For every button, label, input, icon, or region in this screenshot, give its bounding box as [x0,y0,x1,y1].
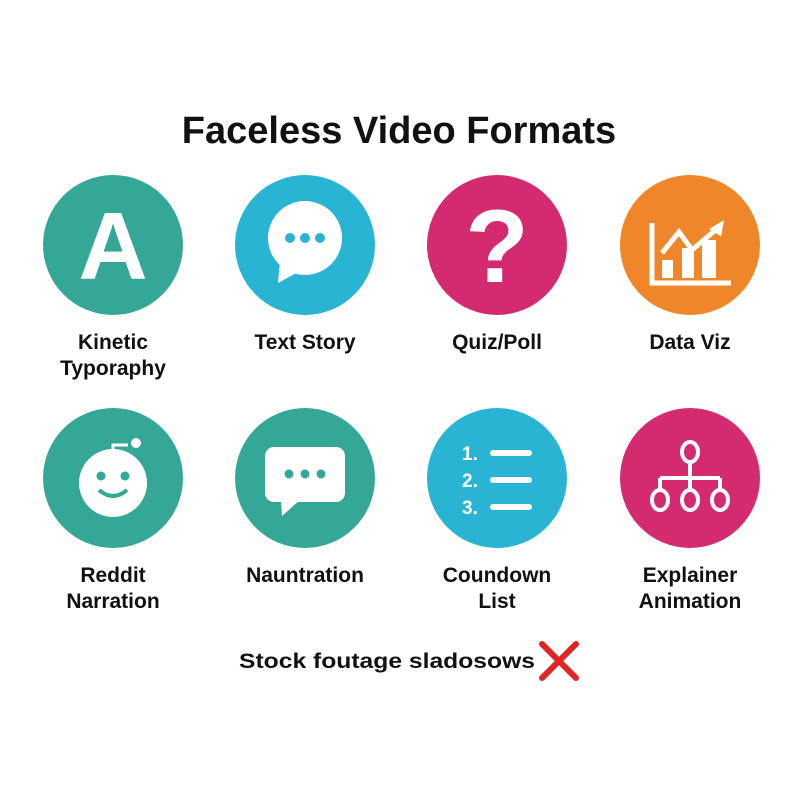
icon: question mark: ? [465,189,529,305]
label: Data Viz [649,331,731,354]
label: Typoraphy [60,357,166,380]
label: Narration [66,590,160,613]
label: Animation [639,590,741,613]
label: Text Story [254,331,356,354]
icon: hierarchy [652,442,728,510]
label: Reddit [80,564,146,587]
label: Quiz/Poll [452,331,542,354]
item: explainer animation [620,408,760,613]
footer note: Stock foutage sladosows [239,650,535,673]
item: countdown list [427,408,567,613]
icon: chat box [265,447,345,502]
item: kinetic typography [43,175,183,380]
icon: numbered list [462,444,478,519]
icon: red X [542,644,576,678]
item: text story [235,175,375,354]
title: Faceless Video Formats [182,110,616,152]
icon: chart [652,223,731,283]
icon: reddit face [113,445,128,462]
item: narration [235,408,375,587]
label: Explainer [643,564,737,587]
item: reddit narration [43,408,183,613]
item: data viz [620,175,760,354]
label: Coundown [443,564,551,587]
icon: speech bubble [268,201,342,283]
icon: numbered list: 2. [462,471,478,492]
icon: numbered list: 1. [462,444,478,465]
label: Nauntration [246,564,364,587]
label: List [478,590,516,613]
icon: letter A: A [78,193,148,300]
label: Kinetic [78,331,148,354]
icon: numbered list: 3. [462,498,478,519]
item: quiz/poll [427,175,567,354]
